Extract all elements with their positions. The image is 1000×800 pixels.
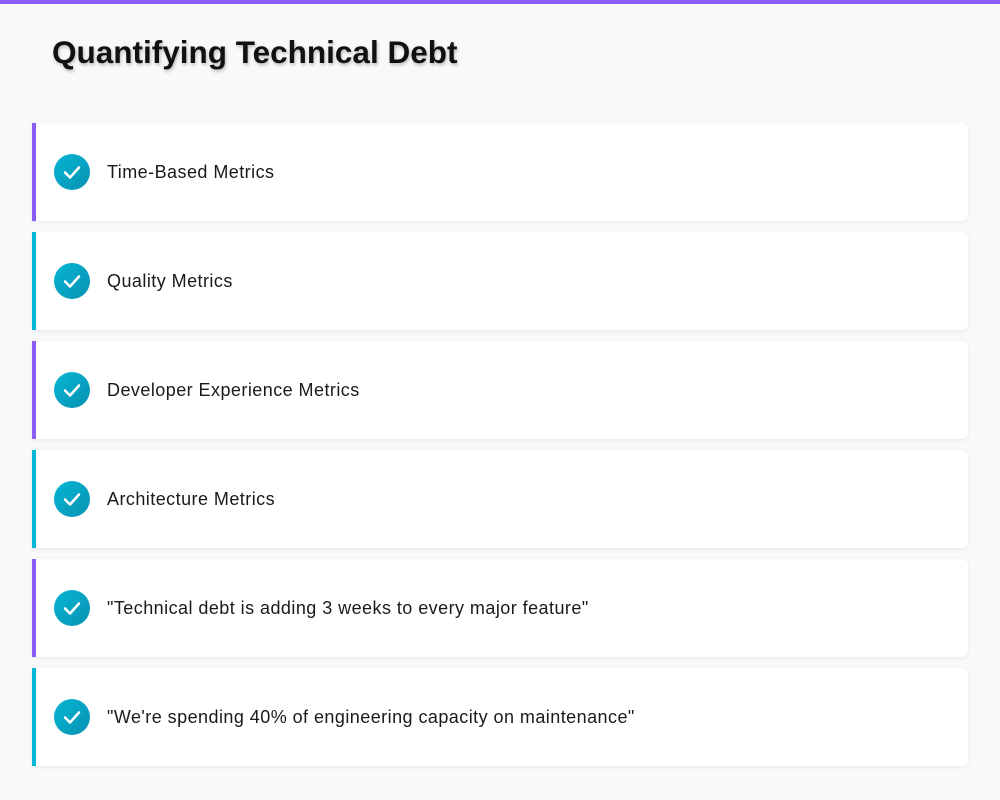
title: Quantifying Technical Debt [52, 34, 457, 70]
card: time-based metrics [32, 123, 968, 221]
icon: check [54, 481, 90, 517]
text: Architecture Metrics [107, 489, 275, 509]
icon: check [54, 590, 90, 626]
icon: check [54, 154, 90, 190]
text: "We're spending 40% of engineering capacity on maintenance" [107, 707, 635, 727]
text: Developer Experience Metrics [107, 380, 360, 400]
text: "Technical debt is adding 3 weeks to every major feature" [107, 598, 589, 618]
card: quality metrics [32, 232, 968, 330]
card: quote 40% [32, 668, 968, 766]
card: quote 3 weeks [32, 559, 968, 657]
card: architecture [32, 450, 968, 548]
icon: check [54, 699, 90, 735]
text: Quality Metrics [107, 271, 233, 291]
text: Time-Based Metrics [107, 162, 274, 182]
icon: check [54, 263, 90, 299]
card: developer experience [32, 341, 968, 439]
icon: check [54, 372, 90, 408]
